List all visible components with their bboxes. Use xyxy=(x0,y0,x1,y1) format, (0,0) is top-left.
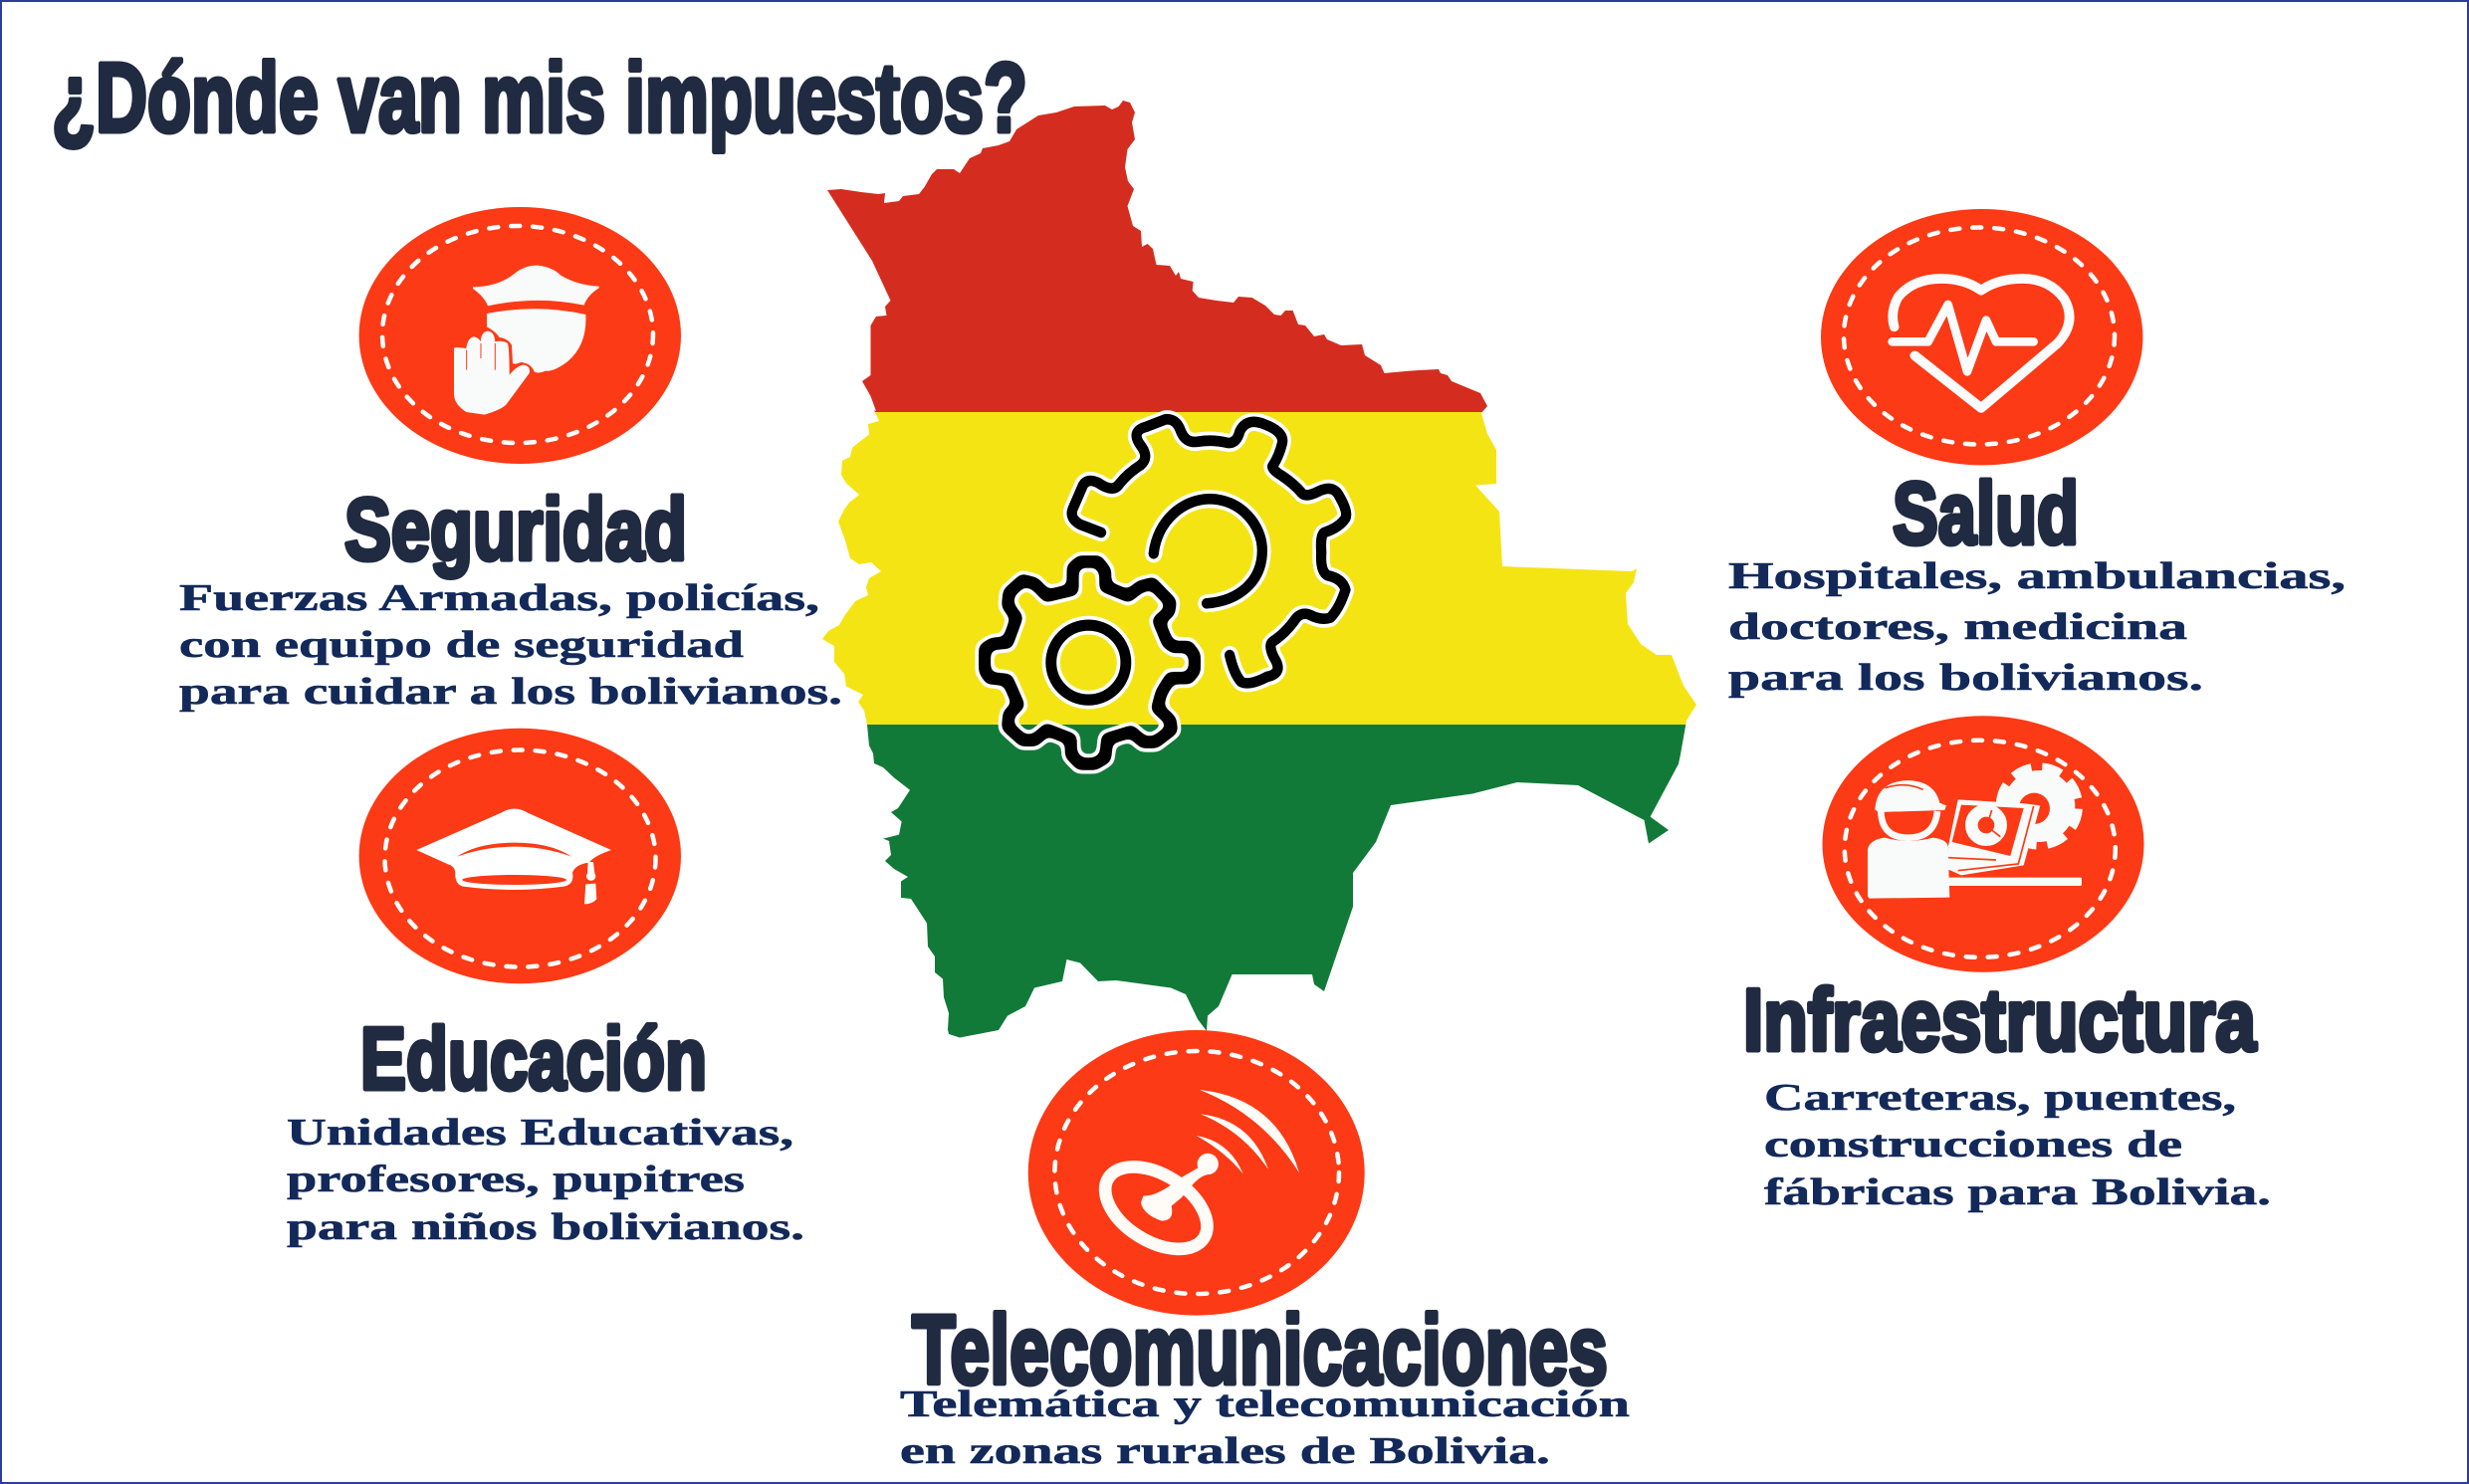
text: infraestructura description: Carreteras, puentes, xyxy=(1764,1077,2236,1119)
text: salud description: Hospitales, ambulancias, xyxy=(1728,555,2346,597)
heading: Seguridad: Seguridad xyxy=(344,480,687,578)
icon: graduation cap badge xyxy=(359,729,681,983)
text: educación description xyxy=(287,1112,804,1248)
icon: large gear xyxy=(1072,419,1346,683)
panel: educación xyxy=(287,729,804,1248)
icon: heart with pulse badge xyxy=(1821,209,2142,465)
text: telecomunicaciones description: en zonas rurales de Bolivia. xyxy=(900,1430,1550,1472)
text: telecomunicaciones description xyxy=(900,1383,1630,1472)
map of Bolivia with flag stripes and gears xyxy=(822,101,1696,1037)
text: educación description: profesores, pupitres xyxy=(287,1159,745,1200)
text: telecomunicaciones description: Telemática y telecomunicación xyxy=(900,1383,1630,1425)
text: educación description: para niños bolivianos. xyxy=(287,1206,804,1248)
text: seguridad description: con equipo de seguridad xyxy=(179,624,744,666)
icon: police officer badge xyxy=(359,207,681,464)
text: seguridad description: Fuerzas Armadas, policías, xyxy=(179,577,819,619)
text: salud description: doctores, medicina xyxy=(1728,606,2187,648)
text: seguridad description xyxy=(179,577,842,713)
icon: small gear xyxy=(985,561,1195,764)
text: salud description xyxy=(1728,555,2346,699)
panel: salud xyxy=(1728,209,2346,699)
panel: seguridad xyxy=(179,207,842,713)
panel: infraestructura xyxy=(1743,716,2271,1213)
heading: Educación: Educación xyxy=(360,1009,707,1108)
text: educación description: Unidades Educativas, xyxy=(287,1112,793,1154)
text: infraestructura description: fábricas para Bolivia. xyxy=(1764,1171,2271,1213)
text: salud description: para los bolivianos. xyxy=(1728,657,2203,699)
heading: Salud: Salud xyxy=(1893,464,2079,562)
icon: satellite dish badge xyxy=(1028,1030,1365,1316)
text: seguridad description: para cuidar a los bolivianos. xyxy=(179,671,842,713)
icon: engineer with laptop badge xyxy=(1822,716,2144,972)
map stripes xyxy=(822,101,1696,1037)
text: infraestructura description xyxy=(1764,1077,2271,1213)
heading: Infraestructura: Infraestructura xyxy=(1743,970,2257,1069)
title: ¿Dónde van mis impuestos? xyxy=(52,43,1027,152)
panel: telecomunicaciones xyxy=(900,1030,1630,1472)
text: infraestructura description: construcciones de xyxy=(1764,1124,2182,1166)
heading: Telecomunicaciones: Telecomunicaciones xyxy=(912,1295,1608,1404)
